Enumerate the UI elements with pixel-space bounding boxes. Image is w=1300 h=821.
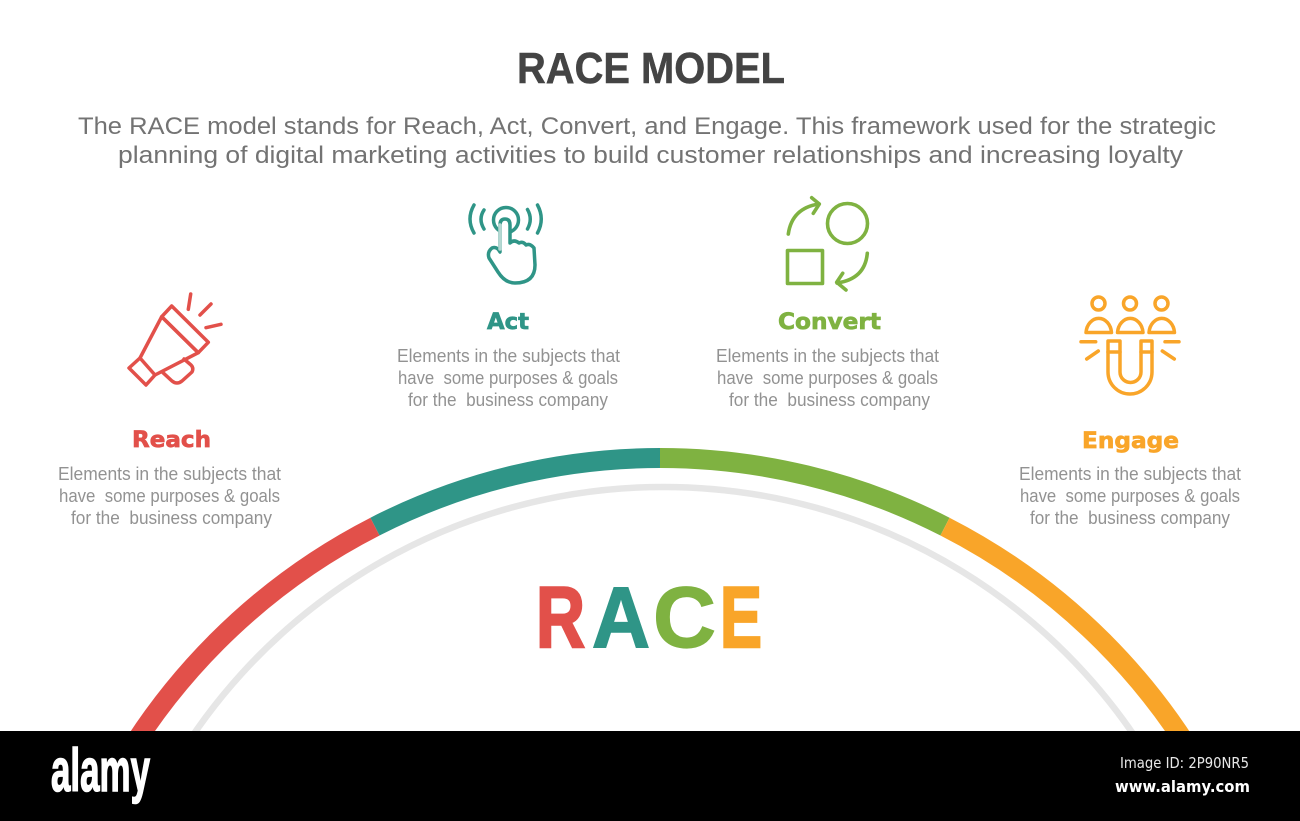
text: act description: have some purposes & goals [398, 368, 618, 388]
text: reach description [58, 464, 281, 528]
image id: Image ID: 2P90NR5 [1120, 754, 1249, 772]
text: reach description: for the business company [71, 508, 272, 528]
title: RACE MODEL [517, 45, 785, 93]
text: act description: for the business company [408, 390, 608, 410]
website: www.alamy.com [1115, 777, 1250, 796]
description text: The RACE model stands for Reach, Act, Convert, and Engage. This framework used for the strategic [78, 113, 1216, 140]
inner grey arc [155, 487, 1172, 800]
text: engage description: have some purposes & goals [1020, 486, 1240, 506]
text: engage description [1019, 464, 1241, 528]
center wordmark: RACE: C [653, 570, 716, 666]
icon: pointing hand with signal [470, 205, 541, 283]
text: act description [397, 346, 620, 410]
text: engage description: Elements in the subjects that [1019, 464, 1241, 484]
logo: alamy: alamy [51, 737, 150, 804]
icon: megaphone [129, 294, 221, 385]
arc segment: engage [945, 527, 1218, 800]
text: act description: Elements in the subjects that [397, 346, 620, 366]
heading: convert: Convert [778, 310, 881, 335]
center wordmark: RACE: A [592, 570, 650, 666]
heading: act: Act [487, 310, 529, 335]
text: convert description [716, 346, 939, 410]
arc segment: act [375, 458, 660, 527]
description text: planning of digital marketing activities to build customer relationships and increasing loyalty [118, 142, 1184, 169]
center wordmark: RACE: R [536, 570, 585, 666]
panel: engage [1019, 297, 1241, 528]
icon: magnet attracting people [1081, 297, 1179, 394]
text: engage description: for the business company [1030, 508, 1230, 528]
icon: shapes with conversion arrows [788, 198, 868, 290]
text: convert description: for the business company [729, 390, 930, 410]
panel: act [397, 205, 620, 410]
heading: reach: Reach [132, 428, 211, 453]
description text [78, 113, 1216, 169]
panel: convert [716, 198, 939, 410]
center wordmark: RACE [536, 570, 762, 666]
center wordmark: RACE: E [720, 570, 762, 666]
text: reach description: have some purposes & goals [59, 486, 280, 506]
heading: engage: Engage [1082, 429, 1179, 454]
text: convert description: have some purposes & goals [717, 368, 938, 388]
footer bar with watermark [0, 731, 1300, 821]
arc segment: convert [660, 458, 945, 527]
arc segment: reach [102, 527, 375, 800]
text: reach description: Elements in the subjects that [58, 464, 281, 484]
chart: semicircular race arc [102, 458, 1218, 800]
panel: reach [58, 294, 281, 528]
text: convert description: Elements in the subjects that [716, 346, 939, 366]
